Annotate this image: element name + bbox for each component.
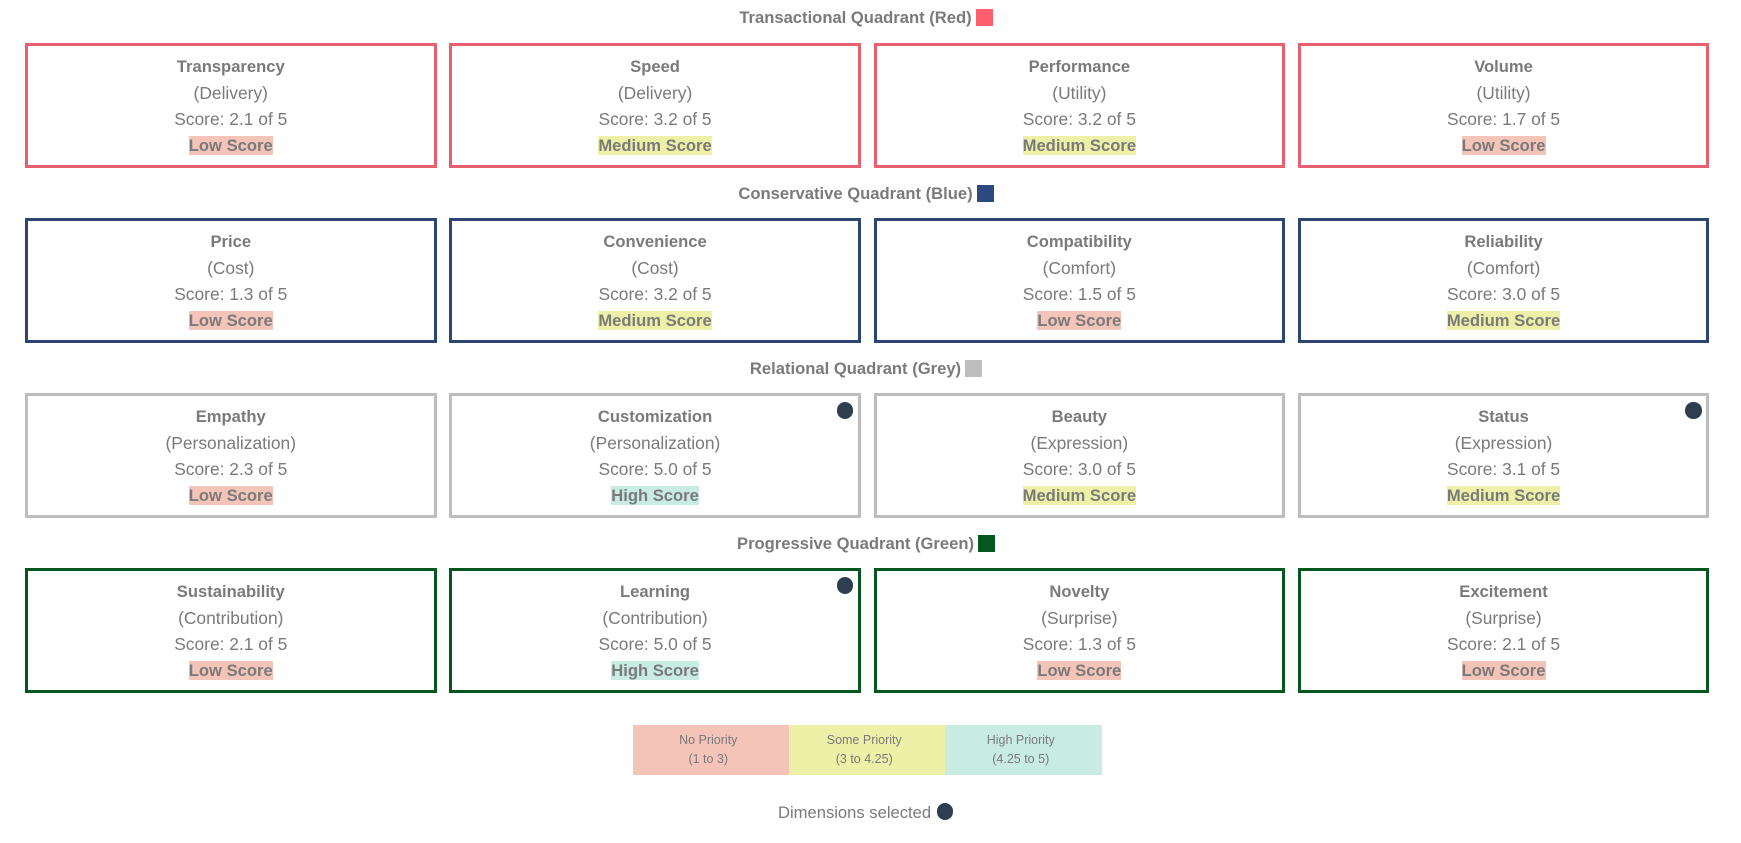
legend item: no priority: (1 to 3) [688, 752, 728, 766]
panel: learning: Score: 5.0 of 5 [598, 634, 712, 654]
legend item: some priority: Some Priority [827, 733, 902, 747]
panel: sustainability [25, 568, 436, 693]
legend item: high priority: (4.25 to 5) [992, 752, 1049, 766]
panel: beauty [874, 393, 1285, 518]
panel: customization: (Personalization) [590, 433, 720, 453]
panel: empathy: Score: 2.3 of 5 [174, 459, 287, 479]
panel: convenience: Convenience [603, 232, 707, 251]
panel: reliability: Reliability [1464, 232, 1543, 251]
panel: status: Medium Score [1447, 486, 1560, 505]
panel: compatibility [874, 218, 1285, 343]
panel: convenience: Medium Score [598, 311, 712, 330]
panel: price: Price [210, 232, 251, 251]
panel: volume [1298, 43, 1709, 168]
legend item: high priority [945, 725, 1102, 775]
panel: convenience: Score: 3.2 of 5 [598, 284, 712, 304]
panel: empathy: (Personalization) [166, 433, 296, 453]
panel: speed: Medium Score [598, 136, 712, 155]
panel: reliability [1298, 218, 1709, 343]
panel: status: (Expression) [1455, 433, 1552, 453]
panel: transparency: (Delivery) [194, 83, 268, 103]
panel: sustainability: (Contribution) [178, 608, 283, 628]
panel: volume: Low Score [1462, 136, 1546, 155]
panel: transparency: Transparency [177, 57, 285, 76]
panel: novelty: Novelty [1049, 582, 1109, 601]
legend item: some priority: (3 to 4.25) [836, 752, 893, 766]
legend item: high priority: High Priority [987, 733, 1055, 747]
panel: novelty: (Surprise) [1041, 608, 1118, 628]
panel: excitement: (Surprise) [1465, 608, 1542, 628]
panel: sustainability: Sustainability [177, 582, 285, 601]
panel: convenience: (Cost) [631, 258, 679, 278]
panel: novelty: Score: 1.3 of 5 [1023, 634, 1136, 654]
panel: compatibility: Score: 1.5 of 5 [1023, 284, 1136, 304]
panel: compatibility: (Comfort) [1043, 258, 1116, 278]
panel: learning: High Score [611, 661, 699, 680]
panel: performance: Score: 3.2 of 5 [1023, 109, 1136, 129]
panel: learning [449, 568, 861, 693]
panel: price: Score: 1.3 of 5 [174, 284, 287, 304]
panel: excitement: Low Score [1462, 661, 1546, 680]
panel: compatibility: Compatibility [1027, 232, 1132, 251]
panel: customization: Customization [598, 407, 712, 426]
panel: volume: Score: 1.7 of 5 [1447, 109, 1560, 129]
legend item: some priority [789, 725, 945, 775]
panel: compatibility: Low Score [1037, 311, 1121, 330]
panel: performance: Medium Score [1023, 136, 1136, 155]
panel: speed: (Delivery) [618, 83, 692, 103]
panel: reliability: (Comfort) [1467, 258, 1540, 278]
panel: price: (Cost) [207, 258, 254, 278]
panel: excitement: Excitement [1459, 582, 1548, 601]
panel: learning: (Contribution) [602, 608, 708, 628]
heading: progressive quadrant: Progressive Quadrant (Green) [737, 534, 974, 553]
panel: transparency: Score: 2.1 of 5 [174, 109, 287, 129]
panel: sustainability: Low Score [189, 661, 273, 680]
panel: volume: Volume [1474, 57, 1533, 76]
panel: price: Low Score [189, 311, 273, 330]
legend item: no priority [633, 725, 789, 775]
panel: status: Status [1478, 407, 1529, 426]
panel: novelty: Low Score [1037, 661, 1121, 680]
panel: reliability: Medium Score [1447, 311, 1560, 330]
panel: speed [449, 43, 861, 168]
heading: relational quadrant: Relational Quadrant (Grey) [750, 359, 961, 378]
panel: learning: Learning [620, 582, 690, 601]
panel: empathy [25, 393, 436, 518]
panel: performance: (Utility) [1052, 83, 1106, 103]
panel: transparency [25, 43, 436, 168]
panel: beauty: (Expression) [1031, 433, 1128, 453]
panel: empathy: Low Score [189, 486, 273, 505]
panel: price [25, 218, 436, 343]
legend item: no priority: No Priority [679, 733, 737, 747]
panel: empathy: Empathy [196, 407, 266, 426]
panel: transparency: Low Score [189, 136, 273, 155]
panel: volume: (Utility) [1476, 83, 1531, 103]
panel: customization: Score: 5.0 of 5 [598, 459, 712, 479]
heading: conservative quadrant: Conservative Quadrant (Blue) [738, 184, 973, 202]
panel: performance: Performance [1029, 57, 1130, 76]
panel: reliability: Score: 3.0 of 5 [1447, 284, 1560, 304]
panel: performance [874, 43, 1285, 168]
legend: priority scale [633, 725, 1102, 775]
panel: status: Score: 3.1 of 5 [1447, 459, 1560, 479]
panel: excitement: Score: 2.1 of 5 [1447, 634, 1560, 654]
panel: beauty: Score: 3.0 of 5 [1023, 459, 1136, 479]
panel: beauty: Beauty [1052, 407, 1107, 426]
panel: sustainability: Score: 2.1 of 5 [174, 634, 287, 654]
panel: speed: Score: 3.2 of 5 [598, 109, 712, 129]
panel: customization [449, 393, 861, 518]
panel: customization: High Score [611, 486, 699, 505]
panel: speed: Speed [630, 57, 680, 76]
panel: convenience [449, 218, 861, 343]
panel: status [1298, 393, 1709, 518]
legend: dimensions selected: Dimensions selected [778, 803, 931, 822]
panel: novelty [874, 568, 1285, 693]
heading: transactional quadrant: Transactional Quadrant (Red) [739, 8, 972, 27]
panel: beauty: Medium Score [1023, 486, 1136, 505]
panel: excitement [1298, 568, 1709, 693]
